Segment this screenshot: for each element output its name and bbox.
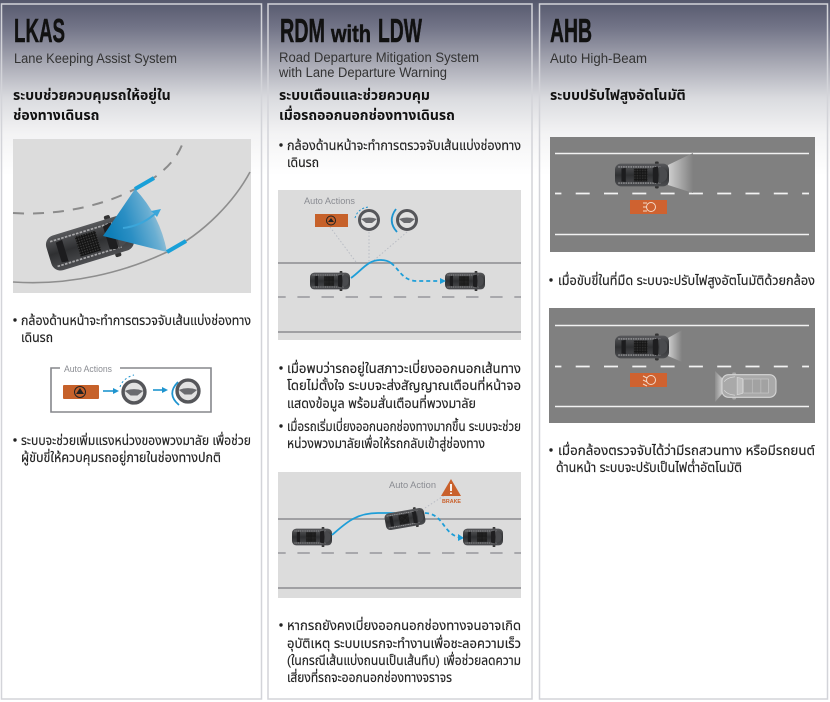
heading: RDM with LDW — [280, 12, 422, 49]
illustration: lane departure warning — [278, 190, 521, 340]
bullet text 4: หากรถยังคงเบี่ยงออกนอกช่องทางจนอาจเกิด — [287, 616, 521, 633]
bullet text 4 — [279, 616, 521, 685]
bullet text 1 — [13, 313, 251, 345]
bullet text 2: เมื่อพบว่ารถอยู่ในสภาวะเบี่ยงออกนอกเส้นทาง — [287, 359, 521, 376]
subtitle: Road Departure Mitigation System: with Lane Departure Warning — [278, 65, 447, 80]
bullet text 1 — [279, 138, 521, 170]
bullet text 1: เดินรถ — [287, 155, 319, 170]
heading: RDM with LDW: with — [330, 21, 371, 48]
Thai heading: เมื่อรถออกนอกช่องทางเดินรถ — [279, 105, 455, 123]
heading: RDM with LDW: RDM — [280, 12, 325, 49]
bullet text 2: แสดงข้อมูล พร้อมสั่นเตือนที่พวงมาลัย — [287, 394, 476, 411]
heading: AHB: AHB — [550, 12, 592, 49]
subtitle: Lane Keeping Assist System: Lane Keeping Assist System — [14, 51, 177, 66]
bullet text 4: เสี่ยงที่รถจะออกนอกช่องทางจราจร — [287, 668, 452, 685]
illustration: lane departure warning: Auto Actions — [304, 196, 355, 206]
subtitle: Auto High-Beam: Auto High-Beam — [550, 51, 647, 66]
bullet text 2 — [279, 359, 521, 411]
illustration: high beam dipped — [549, 308, 815, 423]
bullet text 2 — [549, 441, 815, 475]
panel 1 frame — [2, 4, 262, 699]
illustration: curved lane with camera cone — [13, 139, 251, 293]
panel 2 frame — [268, 4, 532, 699]
bullet text 2 — [13, 431, 251, 465]
bullet text 1: กล้องด้านหน้าจะทำการตรวจจับเส้นแบ่งช่องทาง — [21, 313, 251, 328]
panel: LKAS — [2, 4, 262, 699]
bullet text 3: เมื่อรถเริ่มเบี่ยงออกนอกช่องทางมากขึ้น ระบบจะช่วย — [287, 417, 521, 434]
Thai heading: ระบบเตือนและช่วยควบคุม — [279, 87, 430, 104]
subtitle: Road Departure Mitigation System: Road Departure Mitigation System — [279, 50, 479, 65]
bullet text 2: โดยไม่ตั้งใจ ระบบจะส่งสัญญาณเตือนที่หน้าจอ — [287, 376, 521, 393]
heading: RDM with LDW: LDW — [378, 12, 422, 49]
bullet text 4: อุบัติเหตุ ระบบเบรกจะทำงานเพื่อชะลอความเร็ว — [287, 634, 521, 651]
bullet text 3 — [279, 417, 521, 451]
illustration: high beam on — [550, 137, 815, 252]
auto actions box — [51, 364, 211, 412]
illustration: road departure mitigation with brake: Auto Action — [389, 480, 436, 490]
illustration: road departure mitigation with brake: BRAKE — [442, 499, 462, 505]
bullet text 1: กล้องด้านหน้าจะทำการตรวจจับเส้นแบ่งช่องทาง — [287, 138, 521, 153]
panel: RDM with LDW — [268, 4, 532, 699]
Thai heading: ระบบช่วยควบคุมรถให้อยู่ใน — [13, 87, 171, 105]
subtitle: Road Departure Mitigation System — [278, 50, 479, 80]
bullet text 4: (ในกรณีเส้นแบ่งถนนเป็นเส้นทึบ) เพื่อช่วยลดความ — [287, 651, 521, 668]
panel: AHB — [540, 4, 828, 699]
bullet text 1: เดินรถ — [21, 330, 53, 345]
bullet text 1: เมื่อขับขี่ในที่มืด ระบบจะปรับไฟสูงอัตโนมัติด้วยกล้อง — [558, 271, 815, 288]
bullet text 2: ระบบจะช่วยเพิ่มแรงหน่วงของพวงมาลัย เพื่อช่วย — [21, 431, 251, 448]
bullet text 2: ด้านหน้า ระบบจะปรับเป็นไฟต่ำอัตโนมัติ — [556, 458, 742, 475]
illustration: road departure mitigation with brake — [278, 472, 521, 598]
bullet text 3: หน่วงพวงมาลัยเพื่อให้รถกลับเข้าสู่ช่องทาง — [287, 434, 485, 451]
auto actions box: Auto Actions — [64, 364, 112, 374]
Thai heading: ระบบปรับไฟสูงอัตโนมัติ — [550, 87, 686, 105]
bullet text 2: ผู้ขับขี่ให้ควบคุมรถอยู่ภายในช่องทางปกติ — [21, 448, 221, 465]
bullet text 2: เมื่อกล้องตรวจจับได้ว่ามีรถสวนทาง หรือมีรถยนต์ — [558, 441, 815, 458]
panel 3 frame — [540, 4, 828, 699]
Thai heading: ช่องทางเดินรถ — [13, 107, 99, 123]
heading: LKAS: LKAS — [14, 12, 65, 49]
